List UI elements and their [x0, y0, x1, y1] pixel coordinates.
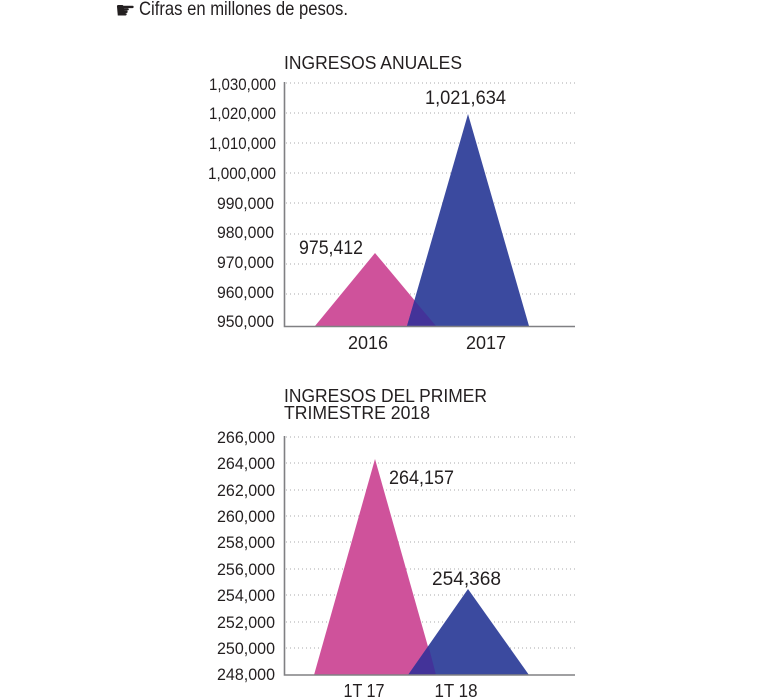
y axis labels: 262,000 [217, 482, 275, 500]
panel: annual revenue chart [208, 52, 576, 353]
panel: first quarter revenue chart [217, 385, 576, 700]
value: 2016: 975,412 [299, 238, 363, 259]
heading: first quarter revenue [284, 385, 487, 423]
y axis labels: 266,000 [217, 429, 275, 447]
heading: annual revenue: INGRESOS ANUALES [284, 52, 462, 73]
y axis labels: 254,000 [217, 587, 275, 605]
y axis labels: 1,020,000 [209, 105, 276, 123]
y axis labels: 1,010,000 [209, 135, 276, 153]
note: figures in millions of pesos [115, 0, 348, 24]
y axis labels [208, 76, 276, 331]
x label: 2016: 2016 [348, 333, 388, 353]
y axis labels: 256,000 [217, 561, 275, 579]
y axis labels: 1,030,000 [209, 76, 276, 94]
y axis labels: 990,000 [217, 195, 274, 213]
y axis labels [217, 429, 275, 684]
heading: first quarter revenue: INGRESOS DEL PRIMER [284, 385, 487, 406]
y axis labels: 960,000 [217, 284, 274, 302]
heading: first quarter revenue: TRIMESTRE 2018 [284, 402, 430, 423]
triangle overlap [408, 646, 436, 675]
y axis labels: 258,000 [217, 534, 275, 552]
y axis labels: 970,000 [217, 254, 274, 272]
triangle: 2016 [315, 253, 436, 326]
y axis labels: 250,000 [217, 640, 275, 658]
y axis labels: 264,000 [217, 455, 275, 473]
triangle: 2017 [407, 114, 529, 326]
y axis labels: 260,000 [217, 508, 275, 526]
y axis labels: 950,000 [217, 313, 274, 331]
y axis labels: 980,000 [217, 224, 274, 242]
x label: 2017: 2017 [466, 333, 506, 353]
y axis labels: 248,000 [217, 666, 275, 684]
triangle: 1T 18 [408, 589, 529, 675]
triangle overlap [407, 300, 436, 326]
value: 1T 17: 264,157 [389, 468, 454, 489]
triangle: 1T 17 [314, 459, 436, 675]
y axis labels: 1,000,000 [208, 165, 276, 183]
value: 2017: 1,021,634 [425, 88, 506, 109]
y axis labels: 252,000 [217, 614, 275, 632]
value: 1T 18: 254,368 [432, 569, 501, 590]
